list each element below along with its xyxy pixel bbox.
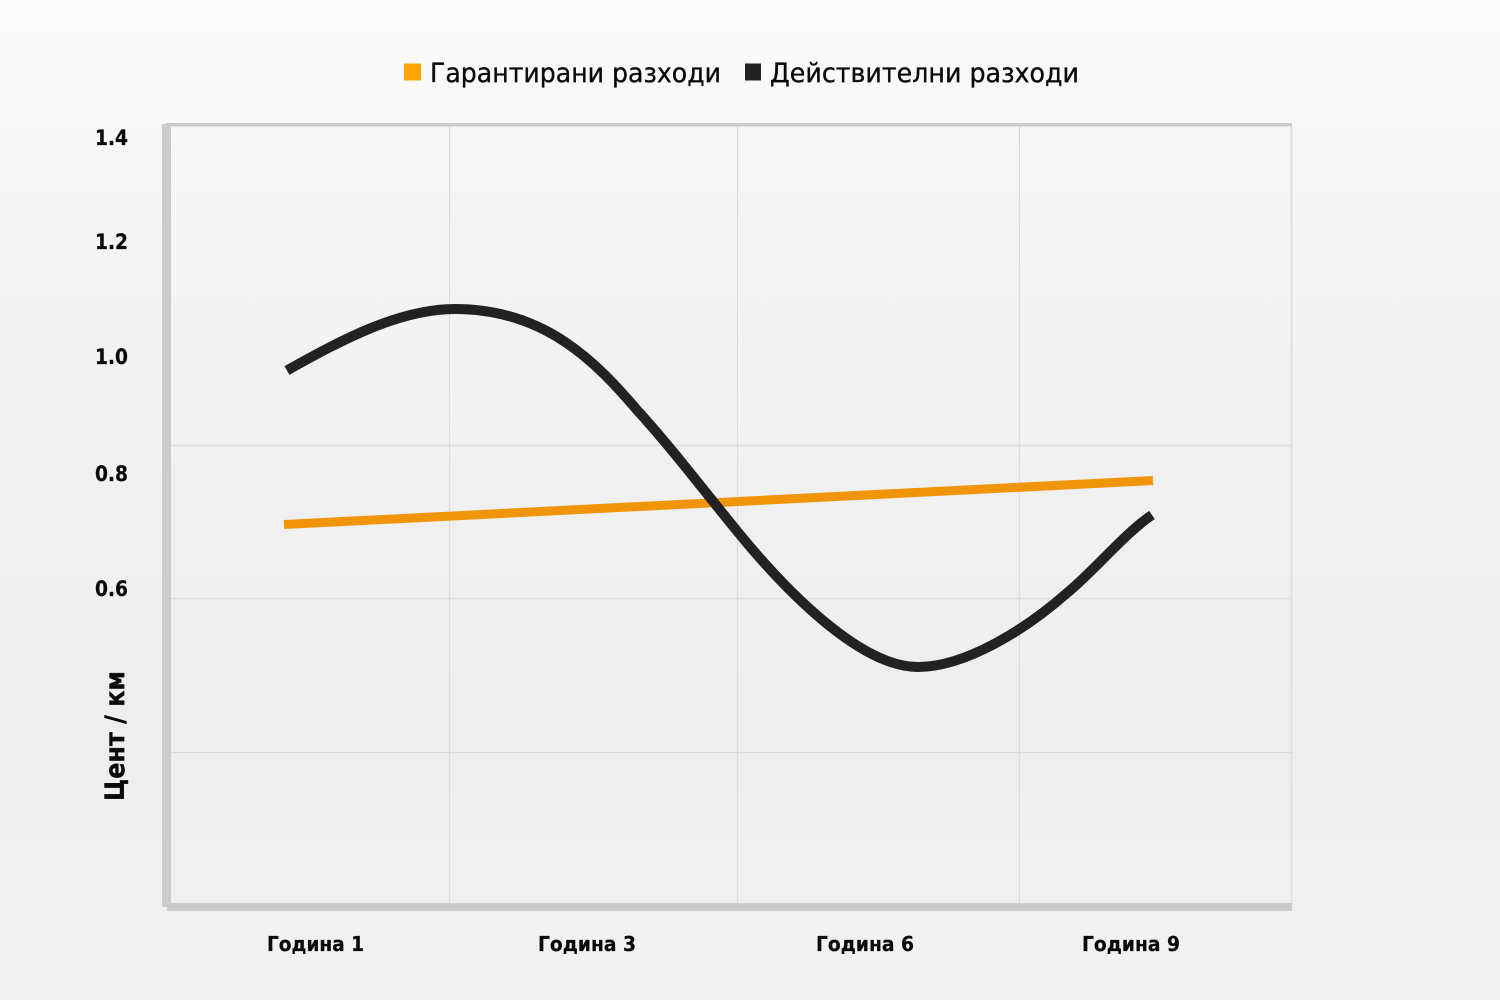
legend swatch: guaranteed costs: [404, 64, 421, 80]
x axis labels: [267, 932, 1180, 956]
y axis tick labels: [95, 126, 128, 602]
grid lines: [171, 126, 1292, 903]
x axis labels: Година 6: [816, 932, 914, 956]
y axis tick labels: 1.2: [95, 230, 128, 255]
x axis labels: Година 9: [1082, 932, 1180, 956]
y axis tick labels: 0.8: [95, 462, 128, 487]
y axis tick labels: 0.6: [95, 577, 128, 602]
chart: [95, 123, 1292, 956]
legend label: guaranteed costs: Гарантирани разходи: [430, 58, 721, 89]
line: guaranteed costs: [284, 480, 1153, 524]
legend swatch: actual costs: [745, 64, 761, 80]
x axis labels: Година 3: [538, 932, 636, 956]
legend: [404, 58, 1079, 89]
y axis tick labels: 1.4: [95, 126, 128, 151]
y axis title: Цент / км: [100, 671, 131, 801]
x axis labels: Година 1: [267, 932, 364, 956]
legend label: actual costs: Действителни разходи: [770, 58, 1079, 89]
curve: actual costs: [287, 309, 1152, 667]
chart frame: axes: [162, 123, 1292, 911]
y axis tick labels: 1.0: [95, 345, 128, 370]
